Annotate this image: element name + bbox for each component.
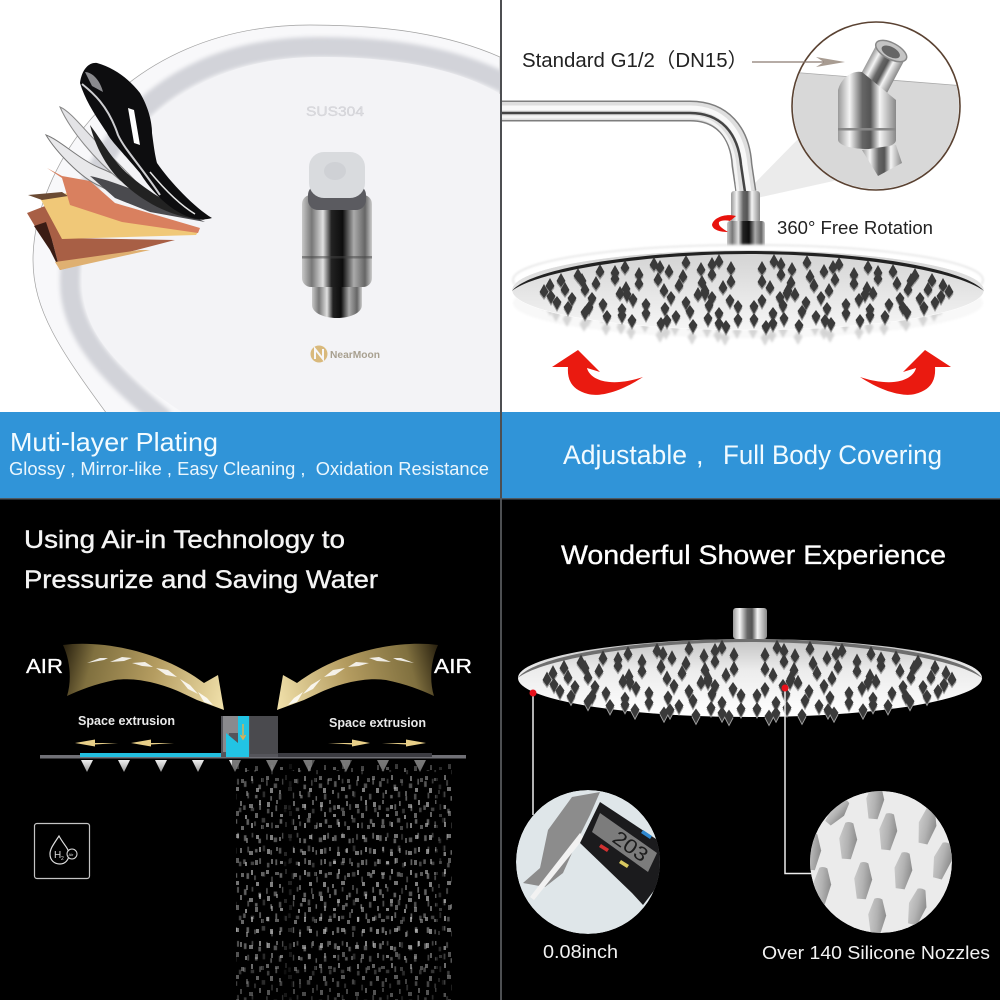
panel: shower experience xyxy=(516,540,990,963)
arrow: air left xyxy=(63,644,224,710)
icon: rotation arrow xyxy=(712,215,736,232)
water spray xyxy=(232,760,457,1000)
heading: Muti-layer Plating: Muti-layer Plating xyxy=(10,427,218,457)
arrows: right extrusion xyxy=(328,740,426,746)
heading: air-in technology: Using Air-in Technology to xyxy=(24,526,345,554)
heading: Adjustable, Full Body Covering xyxy=(563,440,942,470)
panel: adjustable shower arm xyxy=(502,22,984,395)
shower arm pipe xyxy=(502,108,749,192)
heading bar: plating xyxy=(0,412,500,498)
shower head front xyxy=(518,639,982,726)
heading: Adjustable, Full Body Covering: , xyxy=(696,440,704,470)
shower head connector xyxy=(733,608,767,639)
label: 360 rotation: 360° Free Rotation xyxy=(777,218,933,238)
nozzles row xyxy=(81,760,426,772)
panel: air-in technology xyxy=(24,526,472,1000)
connector line: thickness xyxy=(530,690,536,815)
caliper reading: 203 xyxy=(608,827,652,867)
chrome fitting xyxy=(302,152,372,318)
label: thickness: 0.08inch xyxy=(543,942,618,962)
heading: Adjustable, Full Body Covering: Adjustable xyxy=(563,440,687,470)
plating layers xyxy=(27,63,212,270)
heading: air-in technology: Pressurize and Saving Water xyxy=(24,566,378,594)
heading: Adjustable, Full Body Covering: Full Body Covering xyxy=(723,440,942,470)
icon: H2O air badge: H xyxy=(54,850,61,861)
logo: NearMoon xyxy=(310,346,380,362)
shower section plate with water channel xyxy=(40,716,466,758)
icon: H2O air badge: 2 xyxy=(61,856,64,862)
arrow: tilt left xyxy=(552,350,643,395)
panel: multi-layer plating product photo xyxy=(27,25,506,420)
heading bar: adjustable xyxy=(502,412,1000,498)
arrow: tilt right xyxy=(860,350,951,395)
shower head with reflection xyxy=(512,245,984,346)
label: Standard G1/2: Standard G1/2（DN15） xyxy=(522,49,748,72)
connector line: nozzles xyxy=(782,684,812,874)
arrows: left extrusion xyxy=(75,740,174,746)
label: space extrusion left: Space extrusion xyxy=(78,714,175,728)
icon: H2O air badge: Air xyxy=(68,852,74,857)
plate disc xyxy=(33,25,500,414)
engraved text: SUS304: SUS304 xyxy=(306,104,365,119)
plate inner area xyxy=(258,57,500,412)
callout cone xyxy=(752,135,838,198)
label: AIR right: AIR xyxy=(434,656,472,678)
arrow: air right xyxy=(277,644,438,710)
label: space extrusion right: Space extrusion xyxy=(329,716,426,730)
label: nozzle count: Over 140 Silicone Nozzles xyxy=(762,943,990,963)
label: AIR left: AIR xyxy=(26,656,63,678)
heading: air-in technology xyxy=(24,526,378,594)
subheading: plating benefits: Glossy , Mirror-like , Easy Cleaning , Oxidation Resistance xyxy=(9,459,489,479)
inset circle: G1/2 connector xyxy=(790,22,965,200)
plate shadow ring xyxy=(70,47,506,420)
icon: H2O air badge xyxy=(34,824,90,878)
detail circle: caliper xyxy=(516,790,662,934)
detail circle: silicone nozzles xyxy=(810,791,952,933)
heading: Wonderful Shower Experience: Wonderful Shower Experience xyxy=(561,540,946,570)
arrow: standard connector pointer xyxy=(752,57,845,67)
swivel connector xyxy=(727,191,765,250)
logo: NearMoon: NearMoon xyxy=(330,349,380,361)
